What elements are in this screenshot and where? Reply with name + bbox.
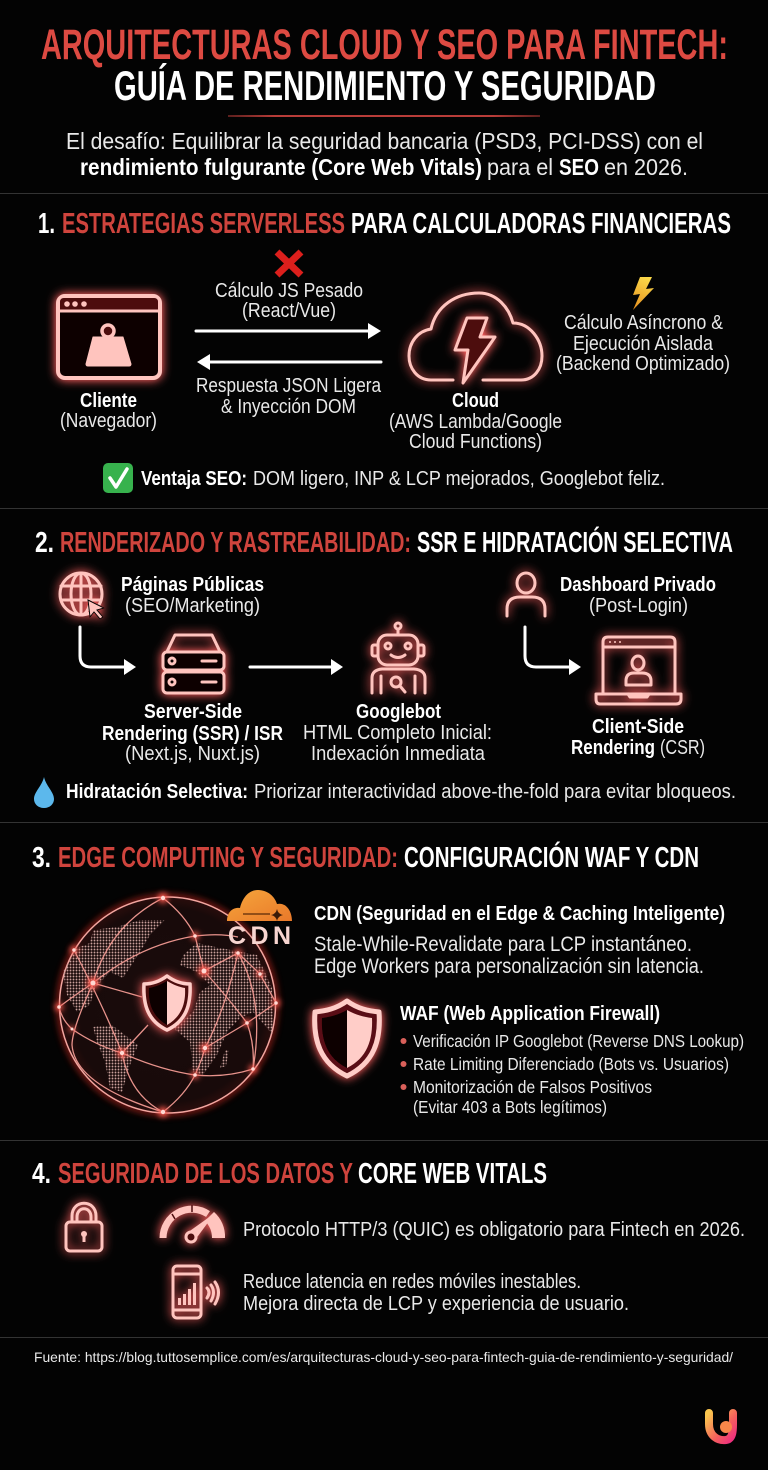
source footer: Fuente: https://blog.tuttosemplice.com/es/arquitecturas-cloud-y-seo-para-fintech-guia-de-rendimiento-y-seguridad/ [34,1349,733,1365]
icon: yellow lightning [633,277,654,310]
icon: phone with signal [173,1266,218,1318]
label: public pages [121,574,264,617]
label: CSR [571,716,705,759]
heading: section 1: 1. [38,208,55,240]
heading: section 4: CORE WEB VITALS [358,1158,547,1190]
intro text: para el [487,154,553,180]
arrow: dashboard to CSR [525,627,581,675]
arrow: client to cloud [196,323,381,339]
label: client [60,390,157,432]
icon: globe with cursor [60,573,104,619]
intro text [66,128,703,180]
icon: user [507,573,545,616]
label: heavy JS calculation [215,280,363,322]
text: latency reduction: Mejora directa de LCP y experiencia de usuario. [243,1293,629,1315]
intro text: El desafío: Equilibrar la seguridad bancaria (PSD3, PCI-DSS) con el [66,128,703,154]
label: async calculation: (Backend Optimizado) [556,353,730,375]
arrow: cloud to client [197,354,381,370]
label: CSR: Client-Side [592,716,684,738]
text block: WAF: Rate Limiting Diferenciado (Bots vs. Usuarios) [413,1054,729,1074]
icon: browser with weight [58,296,160,378]
panel: section 2 rendering [34,525,736,808]
text block: WAF [400,1003,744,1117]
label: private dashboard [560,574,716,617]
intro text: en 2026. [604,154,688,180]
globe network [55,893,280,1117]
label: cloud: (AWS Lambda/Google [389,411,562,433]
label: Googlebot [303,701,492,765]
heading: section 3: EDGE COMPUTING Y SEGURIDAD: [58,842,398,874]
label: client: Cliente [80,390,137,412]
intro text: SEO [559,154,599,180]
label: cloud [389,390,562,453]
arrow: public pages to SSR [80,627,136,675]
label: public pages: (SEO/Marketing) [125,595,260,617]
callout: selective hydration: Hidratación Selectiva: [66,781,248,803]
heading: section 1: ESTRATEGIAS SERVERLESS [62,208,345,240]
label: async calculation [556,312,730,375]
label: SSR [102,701,283,765]
label: SSR: Server-Side [144,701,242,723]
heading: section 4: SEGURIDAD DE LOS DATOS Y [58,1158,353,1190]
label: cloud: Cloud Functions) [409,431,542,453]
heading: section 3: 3. [32,842,51,874]
icon: green check [103,463,133,493]
label: heavy JS calculation: Cálculo JS Pesado [215,280,363,302]
heading: section 1 [38,208,731,240]
heading: section 2: RENDERIZADO Y RASTREABILIDAD: [60,527,411,559]
label: CSR: (CSR) [660,737,705,759]
label: async calculation: Cálculo Asíncrono & [564,312,724,334]
label: private dashboard: Dashboard Privado [560,574,716,596]
label: CSR: Rendering [571,737,655,759]
icon: speed gauge [163,1205,225,1242]
label: Googlebot: HTML Completo Inicial: [303,722,492,744]
label: heavy JS calculation: (React/Vue) [242,300,336,322]
icon: water drop [34,777,54,808]
icon: padlock [66,1203,102,1251]
heading: section 3 [32,840,699,874]
intro text: rendimiento fulgurante (Core Web Vitals) [80,154,482,180]
text block: WAF: (Evitar 403 a Bots legítimos) [413,1097,607,1117]
panel: section 3 edge computing [32,840,744,1117]
label: Googlebot: Indexación Inmediata [311,743,486,765]
label: cloud: Cloud [452,390,499,412]
icon: CDN cloud logo [227,890,292,950]
panel: section 4 data security [32,1158,745,1318]
label: public pages: Páginas Públicas [121,574,264,596]
title [41,21,728,109]
label: Googlebot: Googlebot [356,701,441,723]
arrow: SSR to Googlebot [250,659,343,675]
text block: WAF: Monitorización de Falsos Positivos [413,1077,652,1097]
icon: cloud with lightning [409,293,542,383]
icon: red cross [277,252,301,275]
text block: CDN: Edge Workers para personalización sin latencia. [314,955,704,978]
icon: CDN cloud logo: CDN [228,922,291,950]
icon: robot with magnifier [372,623,425,693]
callout: SEO advantage: Ventaja SEO: [141,468,247,490]
icon: WAF shield [315,1001,379,1076]
heading: section 4: 4. [32,1158,51,1190]
label: private dashboard: (Post-Login) [589,595,688,617]
callout: selective hydration: Priorizar interactividad above-the-fold para evitar bloqueos. [254,781,736,803]
label: client: (Navegador) [60,410,157,432]
icon: laptop with user [596,637,681,704]
icon: server [163,635,224,693]
label: SSR: (Next.js, Nuxt.js) [125,743,260,765]
text: latency reduction: Reduce latencia en redes móviles inestables. [243,1271,581,1293]
label: JSON response: Respuesta JSON Ligera [196,375,382,397]
label: SSR: Rendering (SSR) / ISR [102,723,283,745]
label: JSON response [196,375,382,418]
label: async calculation: Ejecución Aislada [573,333,714,355]
heading: section 2: 2. [35,527,54,559]
text block: CDN [314,903,725,978]
text block: WAF: WAF (Web Application Firewall) [400,1003,660,1025]
icon: brand logo [709,1413,733,1440]
heading: section 2 [35,525,733,559]
label: JSON response: & Inyección DOM [221,396,356,418]
panel: section 1 serverless [38,208,731,493]
callout: SEO advantage: DOM ligero, INP & LCP mejorados, Googlebot feliz. [253,468,665,490]
text: latency reduction [243,1271,629,1315]
callout: selective hydration [66,781,736,803]
text block: CDN: Stale-While-Revalidate para LCP instantáneo. [314,933,692,956]
